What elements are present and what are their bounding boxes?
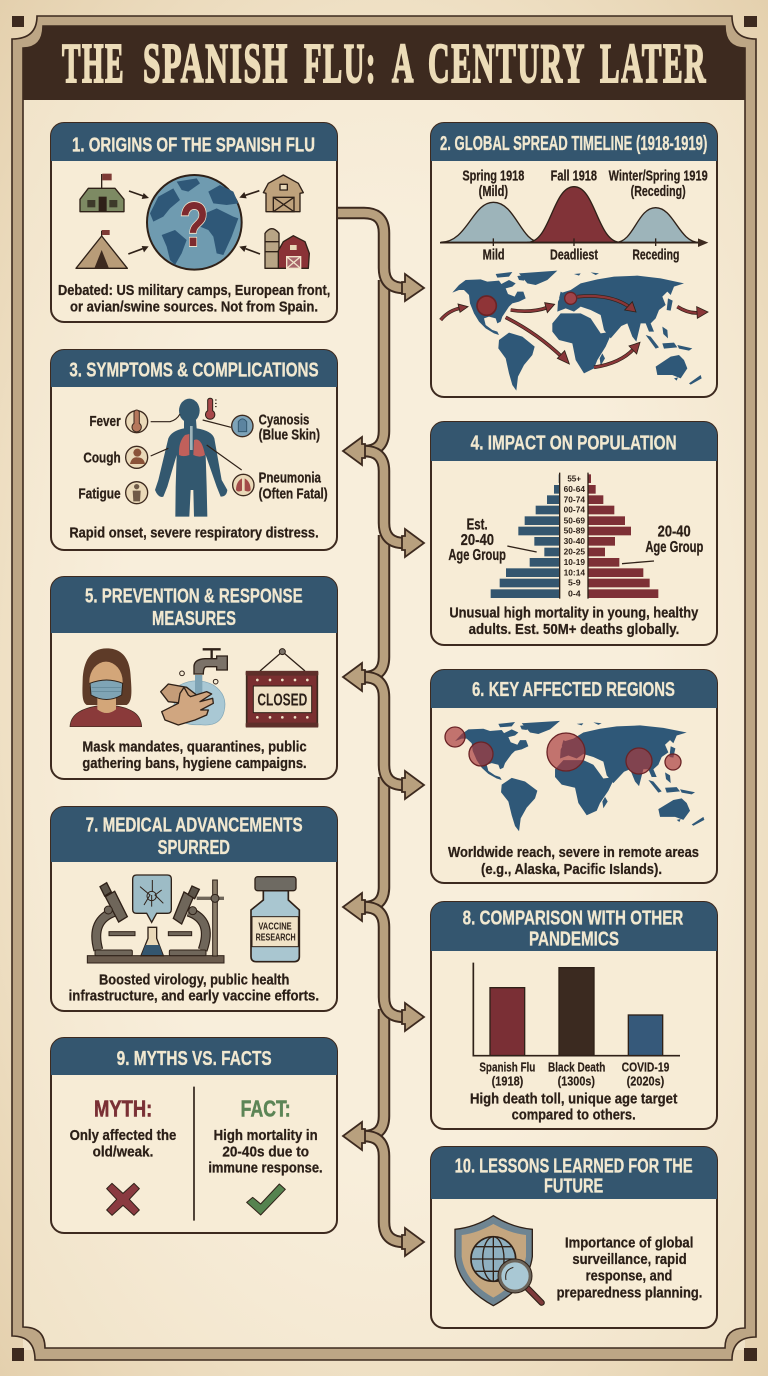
text: prevention summary: Mask mandates, quarantines, public (82, 740, 307, 756)
icon: vaccine vial: RESEARCH (256, 933, 296, 944)
heading: lessons: FUTURE (544, 1176, 603, 1198)
heading: population: 4. IMPACT ON POPULATION (471, 432, 677, 454)
chart: three waves: Deadliest (550, 247, 598, 263)
text: lessons summary: preparedness planning. (557, 1285, 702, 1301)
heading: prevention: MEASURES (152, 608, 236, 630)
heading: medical (86, 815, 303, 859)
labels: symptoms (78, 412, 328, 502)
panel: 3 symptoms (51, 350, 337, 550)
text: comparison summary: High death toll, unique age target (470, 1091, 678, 1107)
column: fact: FACT: (241, 1096, 291, 1122)
text: regions summary: Worldwide reach, severe in remote areas (448, 845, 699, 861)
heading: medical: SPURRED (158, 837, 230, 859)
chart: population pyramid: 10-19 (564, 557, 585, 567)
panel: 8 comparison (431, 902, 717, 1129)
labels: symptoms: Fever (89, 414, 121, 430)
icon: closed sign (246, 649, 318, 727)
heading: lessons (455, 1155, 693, 1198)
panel: 5 prevention (51, 577, 337, 779)
icon: vaccine vial (251, 877, 299, 962)
chart: population pyramid: 60-64 (564, 484, 585, 494)
text: regions summary: (e.g., Alaska, Pacific Islands). (481, 862, 662, 878)
panel: 9 myths vs facts (51, 1038, 337, 1233)
chart: population pyramid: 10:14 (564, 567, 585, 577)
text: lessons summary (557, 1235, 702, 1301)
chart: pandemic bars: Spanish Flu (479, 1060, 535, 1075)
icon: tan barn (263, 175, 303, 212)
icon: red cross (107, 1183, 139, 1215)
chart: population pyramid: 30-40 (564, 536, 585, 546)
labels: symptoms: (Often Fatal) (259, 486, 328, 502)
chart: pandemic bars: Black Death (548, 1060, 605, 1075)
callout: left age group: Est. (467, 516, 488, 533)
heading: symptoms: 3. SYMPTOMS & COMPLICATIONS (69, 360, 319, 382)
text: origins summary: or avian/swine sources. Not from Spain. (70, 300, 318, 316)
chart: three waves: Winter/Spring 1919 (609, 169, 708, 185)
icon: fever (126, 410, 148, 433)
chart: population pyramid: 50-89 (564, 526, 585, 536)
column: fact: 20-40s due to (222, 1144, 309, 1160)
column: myth (70, 1096, 176, 1215)
heading: prevention: 5. PREVENTION & RESPONSE (85, 586, 303, 608)
text: symptoms summary: Rapid onset, severe respiratory distress. (69, 525, 319, 541)
map: spread routes (441, 271, 708, 391)
chart: three waves: Receding (632, 247, 679, 263)
title: SPANISH (143, 33, 289, 95)
chart: three waves (440, 169, 708, 263)
text: prevention summary: gathering bans, hygiene campaigns. (82, 756, 307, 772)
icon: handwashing (161, 649, 227, 725)
panel: 2 timeline (431, 123, 717, 397)
icon: cyanosis (232, 415, 253, 437)
panel: 6 key regions (431, 670, 717, 883)
text: population summary: Unusual high mortality in young, healthy (449, 605, 698, 621)
icon: vaccine vial: VACCINE (258, 921, 292, 932)
labels: symptoms: Fatigue (78, 486, 121, 502)
text: origins summary (58, 283, 330, 316)
text: population summary (449, 605, 698, 638)
text: population summary: adults. Est. 50M+ deaths globally. (469, 622, 679, 638)
icon: human body with lungs (151, 398, 242, 517)
chart: population pyramid: 70-74 (564, 494, 585, 504)
labels: symptoms: Cyanosis (259, 412, 309, 428)
column: myth: old/weak. (93, 1144, 153, 1160)
text: comparison summary (470, 1091, 678, 1124)
text: medical summary (69, 972, 319, 1005)
icon: fatigue (126, 482, 148, 504)
text: prevention summary (82, 740, 307, 772)
icon: military barracks (80, 174, 124, 212)
text: origins summary: Debated: US military camps, European front, (58, 283, 330, 299)
icon: lab microscopes (87, 875, 224, 963)
chart: pandemic bars: COVID-19 (622, 1060, 669, 1075)
connector: winding flow line (337, 213, 424, 1256)
heading: regions: 6. KEY AFFECTED REGIONS (472, 679, 675, 701)
heading: myths: 9. MYTHS VS. FACTS (117, 1048, 272, 1070)
chart: three waves: (Mild) (479, 184, 508, 200)
panel: 4 population impact (431, 422, 717, 645)
icon: masked woman (70, 648, 142, 727)
text: comparison summary: compared to others. (512, 1108, 636, 1124)
map: affected regions (445, 721, 704, 831)
heading: comparison: 8. COMPARISON WITH OTHER (463, 907, 684, 929)
text: medical summary: Boosted virology, public health (99, 972, 289, 988)
callout: right age group: Age Group (645, 539, 703, 556)
icon: army tent (76, 230, 127, 268)
icon: globe with question mark: ? (179, 190, 209, 260)
chart: population pyramid: 55+ (567, 473, 581, 483)
icon: pneumonia (233, 474, 254, 496)
icon: shield with globe and magnifier (455, 1216, 542, 1306)
column: myth: MYTH: (94, 1096, 152, 1122)
callout: left age group: Age Group (448, 547, 506, 564)
chart: three waves: Mild (483, 247, 505, 263)
text: lessons summary: response, and (586, 1269, 672, 1285)
column: fact: High mortality in (214, 1128, 318, 1144)
labels: symptoms: (Blue Skin) (259, 427, 320, 443)
arrows into globe (128, 191, 260, 254)
column: fact (208, 1096, 323, 1215)
chart: population pyramid (491, 473, 658, 599)
text: regions summary (448, 845, 699, 878)
icon: globe with question mark (147, 175, 242, 270)
chart: population pyramid: 20-25 (564, 547, 585, 557)
callout: left age group: 20-40 (461, 532, 494, 549)
icon: green check (247, 1184, 285, 1215)
chart: population pyramid: 0-4 (568, 588, 581, 598)
title banner (23, 26, 745, 100)
chart: three waves: (Receding) (631, 184, 686, 200)
text: lessons summary: surveillance, rapid (572, 1252, 687, 1268)
title: THE (62, 33, 125, 95)
chart: population pyramid: 50-69 (564, 515, 585, 525)
title: A (392, 33, 415, 95)
title: FLU: (304, 33, 377, 95)
panel: 1 origins (51, 123, 337, 322)
chart: population pyramid: 5-9 (568, 578, 581, 588)
callout: right age group: 20-40 (658, 524, 691, 541)
heading: prevention (85, 586, 303, 630)
labels: symptoms: Cough (83, 451, 121, 467)
heading: origins: 1. ORIGINS OF THE SPANISH FLU (72, 135, 315, 157)
heading: comparison (463, 907, 684, 951)
chart: three waves: Fall 1918 (551, 169, 597, 185)
icon: closed sign: CLOSED (257, 690, 307, 710)
icon: cough (126, 446, 148, 468)
chart: three waves: Spring 1918 (462, 169, 524, 185)
text: lessons summary: Importance of global (565, 1235, 693, 1251)
icon: silo and red barn (265, 229, 309, 268)
chart: pandemic bars: (1918) (492, 1074, 523, 1089)
panel: 10 lessons learned (431, 1147, 717, 1328)
column: fact: immune response. (208, 1161, 323, 1177)
chart: pandemic bars: (2020s) (627, 1074, 664, 1089)
labels: symptoms: Pneumonia (259, 471, 322, 487)
callout: left age group (448, 516, 537, 564)
text: medical summary: infrastructure, and early vaccine efforts. (69, 989, 319, 1005)
callout: right age group (622, 524, 703, 564)
heading: comparison: PANDEMICS (529, 929, 619, 951)
chart: pandemic bars: (1300s) (558, 1074, 595, 1089)
title (62, 33, 707, 95)
title: CENTURY (428, 33, 586, 95)
panel: 7 medical advancements (51, 807, 337, 1011)
chart: pandemic bars (473, 963, 680, 1089)
heading: medical: 7. MEDICAL ADVANCEMENTS (86, 815, 303, 837)
chart: population pyramid: 00-74 (564, 505, 585, 515)
column: myth: Only affected the (70, 1128, 176, 1144)
